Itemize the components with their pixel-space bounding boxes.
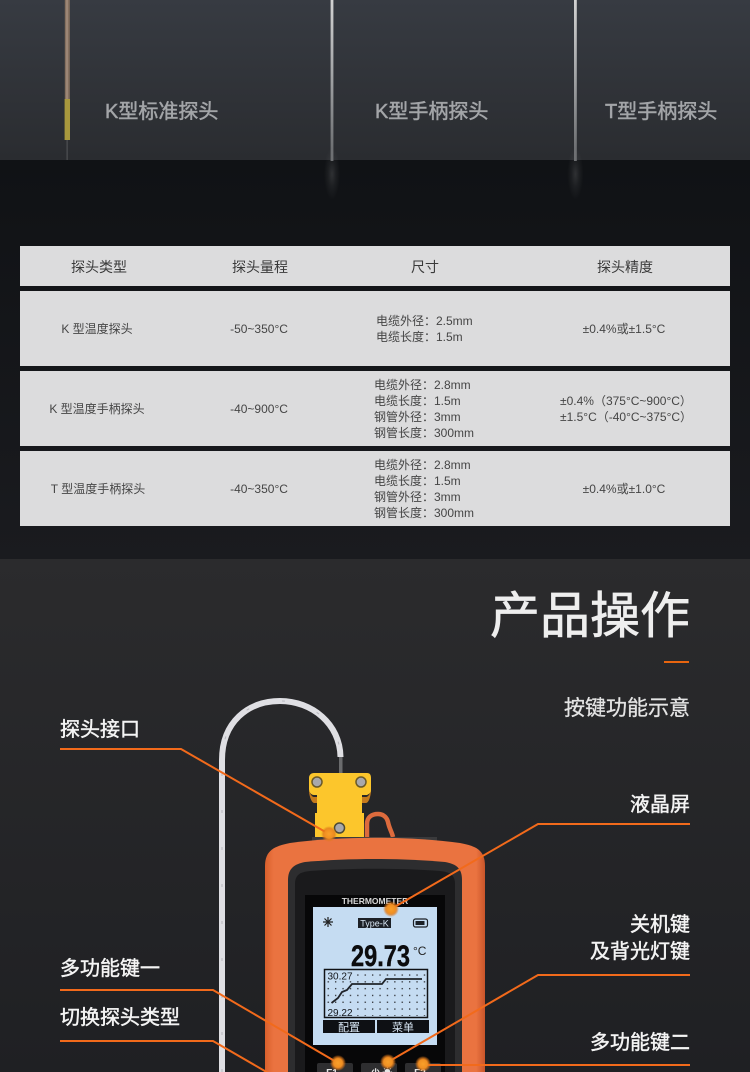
table row: K-type handle probe: ±1.5°C（-40°C~375°C） [560, 410, 692, 424]
table header row: 尺寸 [411, 259, 439, 275]
table row: T-type handle probe: 电缆长度：1.5m [374, 473, 461, 488]
table row: K-type probe [20, 291, 730, 366]
device buttons [317, 1063, 441, 1072]
table row: T-type handle probe: ±0.4%或±1.0°C [583, 482, 666, 496]
table row: T-type handle probe: 钢管外径：3mm [374, 489, 461, 504]
label: T-type handle probe: T型手柄探头 [605, 100, 717, 123]
table row: K-type probe: K 型温度探头 [61, 321, 133, 336]
callout: switch probe type [60, 1006, 270, 1072]
LCD screen [313, 907, 437, 1045]
table row: K-type handle probe: 电缆外径：2.8mm [374, 378, 471, 392]
callout: switch probe type: 切换探头类型 [60, 1006, 180, 1029]
panel: product operation background [0, 559, 750, 1072]
callout: probe port: 探头接口 [60, 718, 140, 741]
table row: T-type handle probe: T 型温度手柄探头 [51, 481, 145, 496]
table row: K-type handle probe: 钢管长度：300mm [374, 425, 474, 440]
softkey: menu: 菜单 [392, 1021, 414, 1034]
table: probe specifications [20, 246, 730, 526]
label: K-type standard probe: K型标准探头 [105, 100, 218, 123]
panel: probe photo background [0, 0, 750, 559]
callout: multifunction key one [60, 957, 346, 1071]
temperature unit: °C [413, 944, 427, 958]
probe type badge: Type-K [360, 918, 389, 928]
device orange housing [265, 838, 485, 1072]
icon: thermocouple connector [309, 773, 437, 841]
table row: K-type handle probe: K 型温度手柄探头 [49, 401, 145, 416]
icon: battery [414, 919, 428, 927]
table row: K-type handle probe: 电缆长度：1.5m [374, 393, 461, 408]
icon: backlight sun [323, 917, 333, 927]
title accent line [664, 661, 689, 663]
icon: K-type handle probe [324, 0, 340, 200]
table row: K-type probe: 电缆长度：1.5m [376, 329, 463, 344]
callout: probe port [60, 718, 337, 842]
table row: K-type handle probe [20, 371, 730, 446]
table row: T-type handle probe [20, 451, 730, 526]
table row: T-type handle probe: 钢管长度：300mm [374, 505, 474, 520]
table row: K-type handle probe: 钢管外径：3mm [374, 409, 461, 424]
table row: K-type handle probe: -40~900°C [230, 402, 288, 416]
device black bezel [288, 859, 462, 1072]
callout: power and backlight key [380, 913, 690, 1070]
table row: T-type handle probe: -40~350°C [230, 482, 288, 496]
label: K-type handle probe: K型手柄探头 [375, 100, 488, 123]
title: 产品操作 [490, 588, 690, 644]
callout: power and backlight key: 关机键 [630, 913, 690, 936]
table row: T-type handle probe: 电缆外径：2.8mm [374, 458, 471, 472]
table row: K-type probe: ±0.4%或±1.5°C [583, 322, 666, 336]
icon: thermometer device [265, 838, 485, 1072]
callout: LCD screen [383, 793, 690, 917]
softkey: config: 配置 [338, 1021, 360, 1034]
callout: multifunction key one: 多功能键一 [60, 957, 160, 980]
temperature trend chart: 30.27 [328, 972, 353, 982]
callout: power and backlight key: 及背光灯键 [590, 940, 690, 963]
icon: probe cable [222, 701, 342, 1072]
callout: LCD screen: 液晶屏 [630, 793, 690, 816]
icon: T-type handle probe [567, 0, 583, 200]
icon: K-type standard probe [65, 0, 70, 160]
table header row: 探头量程 [232, 259, 288, 275]
table header row [20, 246, 730, 286]
device brand label: THERMOMETER [342, 896, 408, 906]
callout: multifunction key two [415, 1031, 690, 1072]
callout: multifunction key two: 多功能键二 [590, 1031, 690, 1054]
table header row: 探头类型 [71, 259, 127, 275]
subtitle: 按键功能示意 [564, 697, 690, 720]
temperature trend chart: 29.22 [328, 1008, 353, 1019]
temperature reading: 29.73 [351, 940, 410, 973]
table row: K-type probe: -50~350°C [230, 322, 288, 336]
table row: K-type handle probe: ±0.4%（375°C~900°C） [560, 394, 692, 408]
temperature trend chart [324, 970, 428, 1019]
table header row: 探头精度 [597, 259, 653, 275]
table row: K-type probe: 电缆外径：2.5mm [376, 314, 473, 328]
